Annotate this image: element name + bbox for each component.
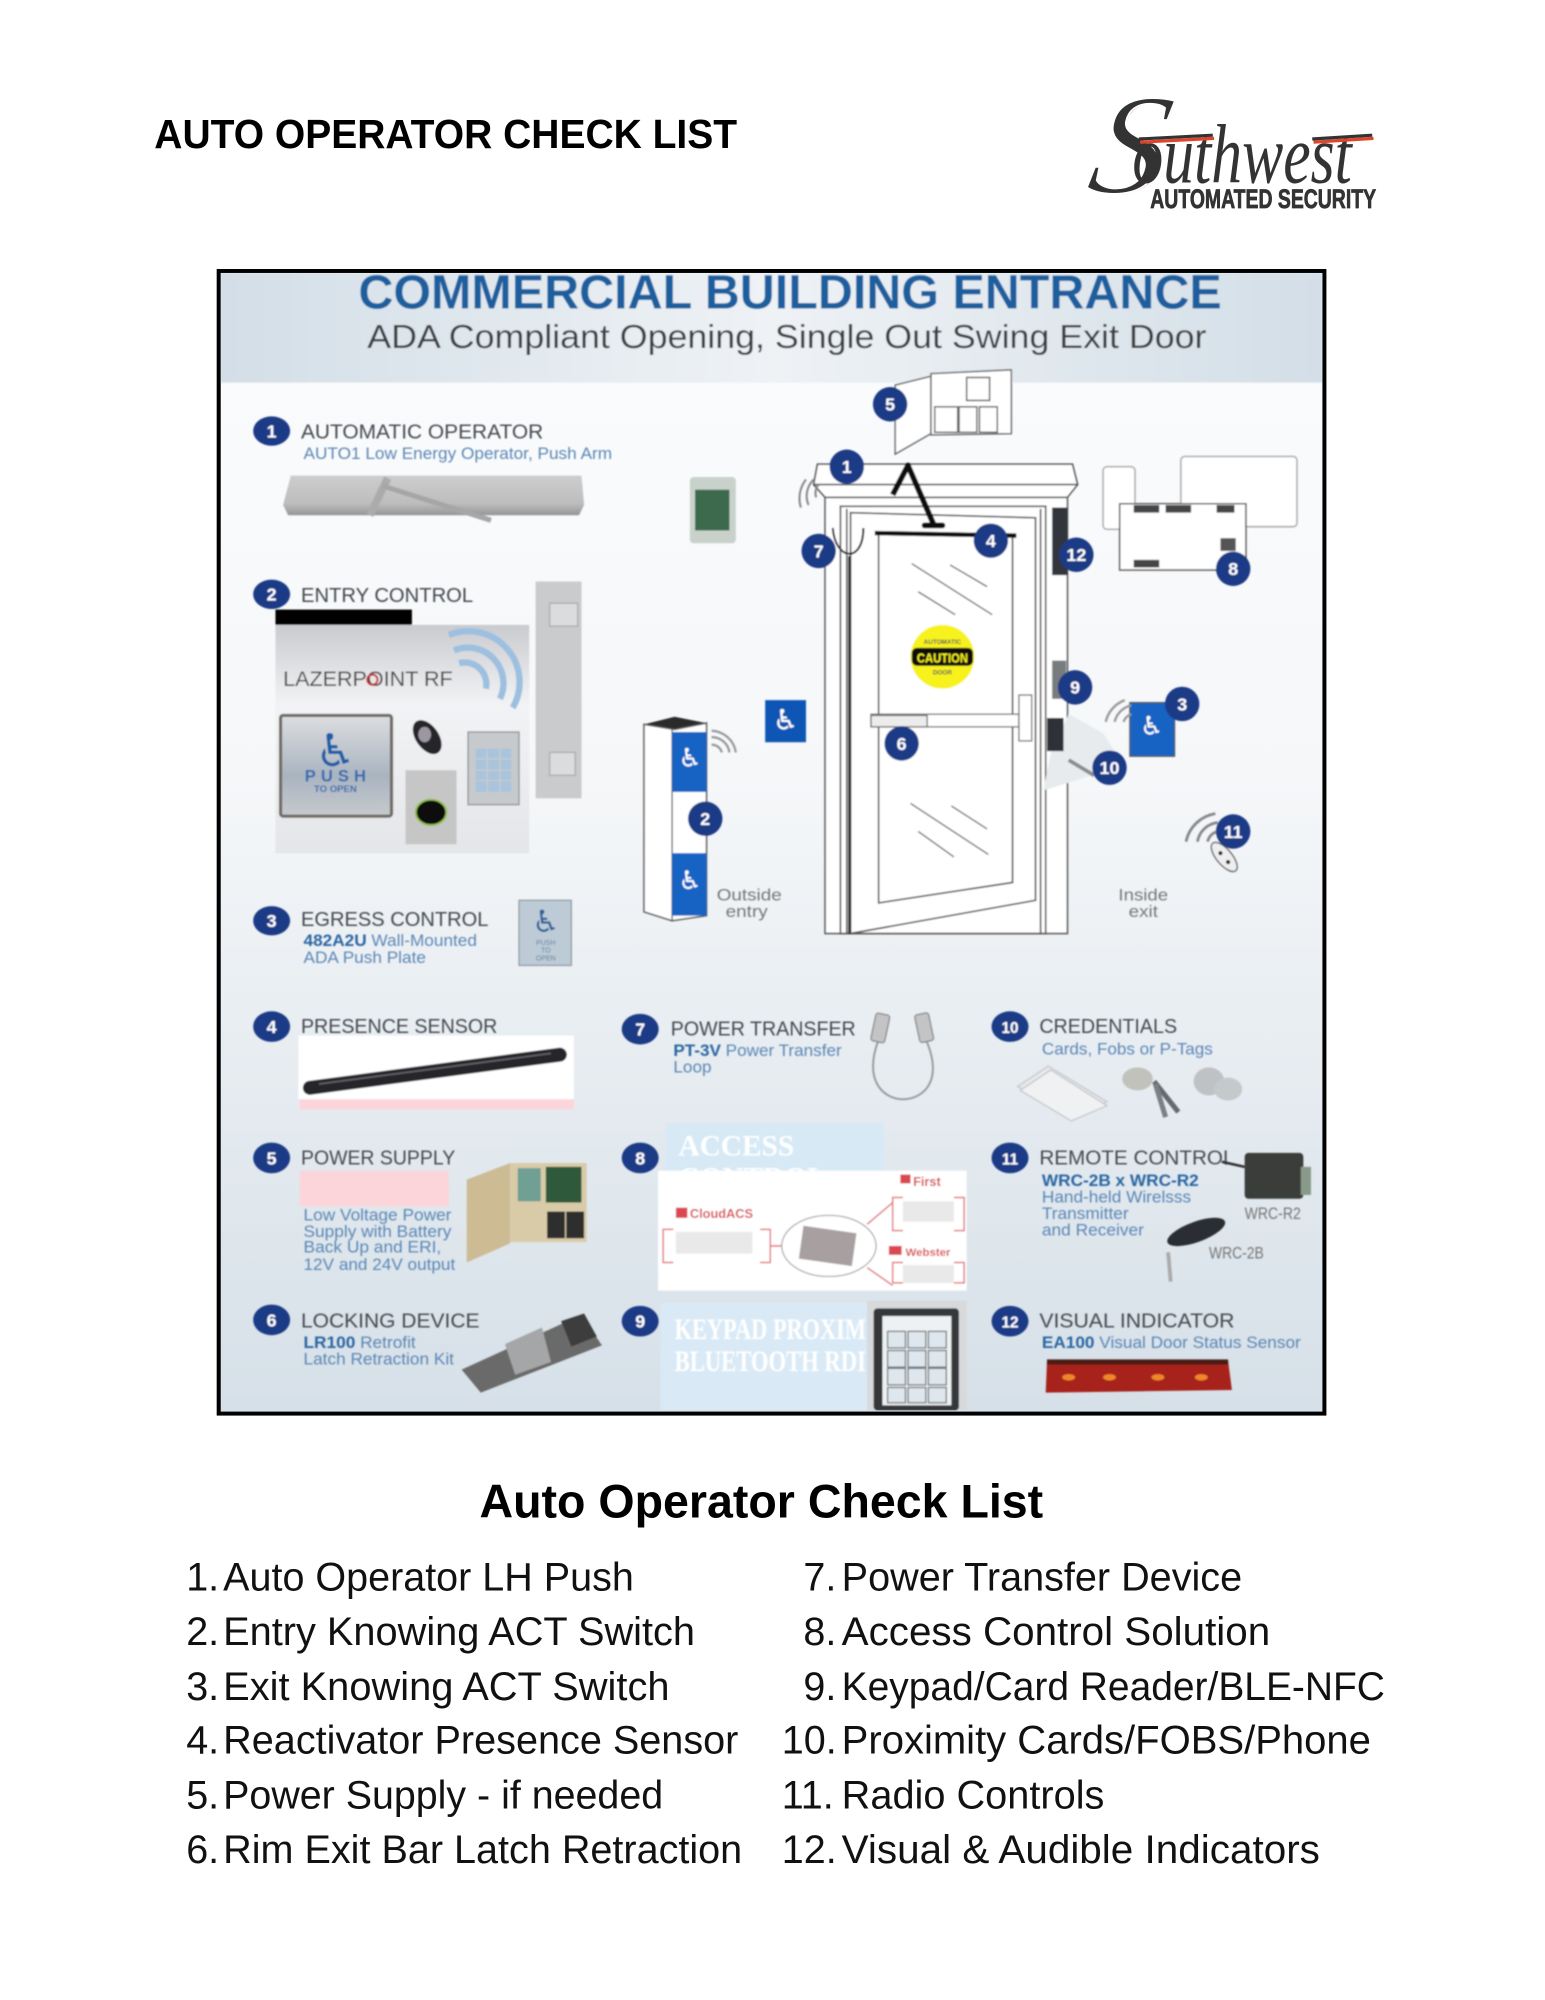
numbered callouts: 9 [1070,678,1080,698]
check list right column: Power Transfer Device [842,1555,1242,1599]
numbered callouts: 3 [1177,694,1187,714]
numbered callouts: 11 [1224,822,1243,842]
inside exit label: exit [1129,902,1158,921]
item 10: credentials: CREDENTIALS [1039,1016,1177,1038]
item 11: remote control: WRC-2B x WRC-R2 [1042,1171,1199,1190]
check list left column: Entry Knowing ACT Switch [223,1610,695,1654]
item 11: remote control: and Receiver [1042,1221,1144,1240]
check list right column: 8. [803,1610,836,1654]
remote fob with signal [1186,814,1242,876]
Lazerpoint RF photo [275,625,529,853]
accessibility sign: ♿ [773,703,798,736]
caution sticker: DOOR [933,670,952,677]
logo: Southwest Automated Security [1077,66,1376,225]
check list right column: Keypad/Card Reader/BLE-NFC [842,1665,1385,1709]
Lazerpoint RF photo: LAZERPOINT RF [283,666,453,691]
glass reflections [911,564,992,857]
item 12: visual indicator [992,1306,1301,1393]
numbered callouts: 7 [814,541,824,561]
access control chart [658,1171,967,1291]
item 1: automatic operator: 1 [267,421,277,441]
numbered callouts: 10 [1100,758,1119,778]
item 11: remote control [992,1143,1311,1282]
check list right column: 9. [803,1665,836,1709]
outside entry label: Outside [717,885,782,904]
item 9: keypad: 9 [635,1312,645,1332]
power transfer loop [833,528,863,933]
item 11: remote control: 11 [1002,1151,1019,1168]
logo: Southwest Automated Security: AUTOMATED SECURITY [1150,184,1376,214]
item 3: egress control: PUSH [536,940,556,947]
phone, monitor, controller [1103,457,1297,570]
check list left column: Exit Knowing ACT Switch [223,1665,670,1709]
item 6: locking device: LOCKING DEVICE [301,1311,480,1333]
exit bar [871,695,1032,741]
visual indicator and keypad strips [1052,508,1067,575]
item 3: egress control: ♿ [532,905,560,940]
check list right column: 11. [782,1773,834,1817]
check list right column: 10. [782,1718,837,1762]
check list left column: 4. [186,1718,219,1762]
item 9: keypad: KEYPAD PROXIM [675,1314,866,1346]
numbered callouts: 4 [986,531,996,551]
item 2: entry control [253,580,582,853]
panel heading: COMMERCIAL BUILDING ENTRANCE [358,266,1222,320]
item 11: remote control: WRC-R2 [1245,1204,1301,1223]
check list left column: Reactivator Presence Sensor [223,1718,738,1762]
item 3: egress control: EGRESS CONTROL [301,909,488,931]
panel: commercial building entrance diagram [219,266,1324,1414]
item 12: visual indicator: 12 [1002,1315,1019,1332]
outside entry column: ♿ [678,743,701,773]
item 5: power supply: Back Up and ERI, [304,1237,441,1256]
numbered callouts: 6 [897,734,907,754]
item 4: presence sensor [253,1011,574,1109]
item 10: credentials: 10 [1002,1020,1019,1037]
check list left column: 1. [186,1555,219,1599]
inside exit label: Inside [1118,885,1168,904]
item 10: credentials [992,1011,1242,1121]
check list right column: Proximity Cards/FOBS/Phone [842,1718,1371,1762]
inside push plate: ♿ [1140,712,1163,742]
check list heading: Auto Operator Check List [480,1475,1043,1528]
logo: Southwest Automated Security: outhwest [1132,108,1354,201]
outside entry label: entry [726,902,769,921]
check list right column: 12. [782,1828,837,1872]
item 1: automatic operator: AUTO1 Low Energy Operator, Push Arm [304,444,612,463]
numbered callouts: 1 [842,457,852,477]
item 5: power supply: 12V and 24V output [304,1255,456,1274]
item 11: remote control: WRC-2B [1209,1244,1264,1263]
credentials reader cluster [1043,714,1122,791]
check list right column: 7. [803,1555,836,1599]
item 8: access control [622,1124,967,1291]
access control chart: First [913,1174,941,1189]
check list left column: 6. [186,1828,219,1872]
panel subheading: ADA Compliant Opening, Single Out Swing Exit Door [367,318,1206,356]
item 5: power supply: 5 [267,1148,277,1168]
caution sticker: AUTOMATIC [924,639,962,646]
access control chart: CloudACS [690,1206,753,1221]
item 11: remote control: REMOTE CONTROL [1039,1147,1234,1169]
outside entry column [644,717,736,921]
accessibility sign [765,700,806,742]
item 5: power supply [253,1143,587,1274]
item 8: access control: CONTROL [678,1162,827,1194]
wall pillar [536,582,582,798]
door frame [814,464,1078,933]
inside exit label [1118,885,1168,921]
item 3: egress control: TO [541,948,551,955]
check list right column: Visual & Audible Indicators [842,1828,1320,1872]
operator arm and sensor bar [875,465,1016,536]
item 4: presence sensor: 4 [267,1017,277,1037]
item 12: visual indicator: VISUAL INDICATOR [1039,1311,1234,1333]
item 3: egress control: 482A2U Wall-Mounted [304,931,477,950]
check list left column: Rim Exit Bar Latch Retraction [223,1828,742,1872]
check list left column [186,1555,742,1872]
panel content [221,266,1322,1410]
door diagram [644,370,1297,933]
item 7: power transfer: Loop [673,1057,712,1076]
item 6: locking device: Latch Retraction Kit [304,1350,454,1369]
Lazerpoint RF photo: ♿ [315,723,356,777]
item 5: power supply: Low Voltage Power [304,1205,452,1224]
check list left column: 2. [186,1610,219,1654]
board photo [690,477,736,543]
item 3: egress control [253,900,571,967]
caution sticker [911,625,974,689]
check list right column: Radio Controls [842,1773,1104,1817]
Lazerpoint RF photo: TO OPEN [314,784,357,795]
header band [221,266,1322,383]
caution sticker: CAUTION [917,651,968,666]
numbered callouts: 12 [1066,545,1086,565]
item 5: power supply: POWER SUPPLY [301,1147,456,1169]
item 4: presence sensor: PRESENCE SENSOR [301,1016,497,1038]
Lazerpoint RF photo: PUSH [305,767,366,786]
item 7: power transfer: PT-3V Power Transfer [673,1041,842,1060]
item 8: access control: 8 [635,1148,645,1168]
power supply cabinet drawing [895,370,1011,454]
outside entry label [717,885,782,921]
numbered callouts [688,387,1250,849]
item 6: locking device [253,1305,602,1393]
operator signal waves [799,480,819,508]
item 9: keypad [622,1301,967,1410]
item 2: entry control: 2 [267,585,277,605]
item 8: access control: ACCESS [678,1130,794,1162]
check list right column: Access Control Solution [842,1610,1270,1654]
item 11: remote control: Transmitter [1042,1204,1129,1223]
item 7: power transfer [622,1013,934,1099]
logo: Southwest Automated Security: S [1079,67,1186,225]
item 6: locking device: 6 [267,1310,277,1330]
title: AUTO OPERATOR CHECK LIST [154,111,737,157]
item 11: remote control: Hand-held Wirelsss [1042,1188,1191,1207]
power supply cabinet [467,1163,587,1263]
item 3: egress control: 3 [267,911,277,931]
check list left column: Auto Operator LH Push [223,1555,634,1599]
item 7: power transfer: 7 [635,1020,645,1040]
item 6: locking device: LR100 Retrofit [304,1333,416,1352]
item 9: keypad: BLUETOOTH RDI [675,1346,866,1378]
outside entry column: ♿ [678,866,701,896]
item 2: entry control: ENTRY CONTROL [301,585,473,607]
item 1: automatic operator: AUTOMATIC OPERATOR [301,422,543,444]
access control chart: Webster [905,1247,951,1259]
numbered callouts: 5 [885,395,895,415]
logo: Southwest Automated Security: S [1077,66,1185,224]
item 10: credentials: Cards, Fobs or P-Tags [1042,1040,1213,1059]
item 3: egress control: OPEN [536,955,556,962]
check list left column: 5. [186,1773,219,1817]
item 12: visual indicator: EA100 Visual Door Status Sensor [1042,1333,1301,1352]
numbered callouts: 8 [1228,559,1238,579]
check list left column: Power Supply - if needed [223,1773,663,1817]
item 5: power supply: Supply with Battery [304,1222,452,1241]
keypad photo [867,1301,967,1410]
item 3: egress control: ADA Push Plate [304,948,426,967]
item 1: automatic operator [253,416,612,520]
inside push plate [1106,700,1175,756]
check list left column: 3. [186,1665,219,1709]
item 7: power transfer: POWER TRANSFER [671,1019,856,1041]
check list right column [782,1555,1385,1872]
numbered callouts: 2 [700,809,710,829]
